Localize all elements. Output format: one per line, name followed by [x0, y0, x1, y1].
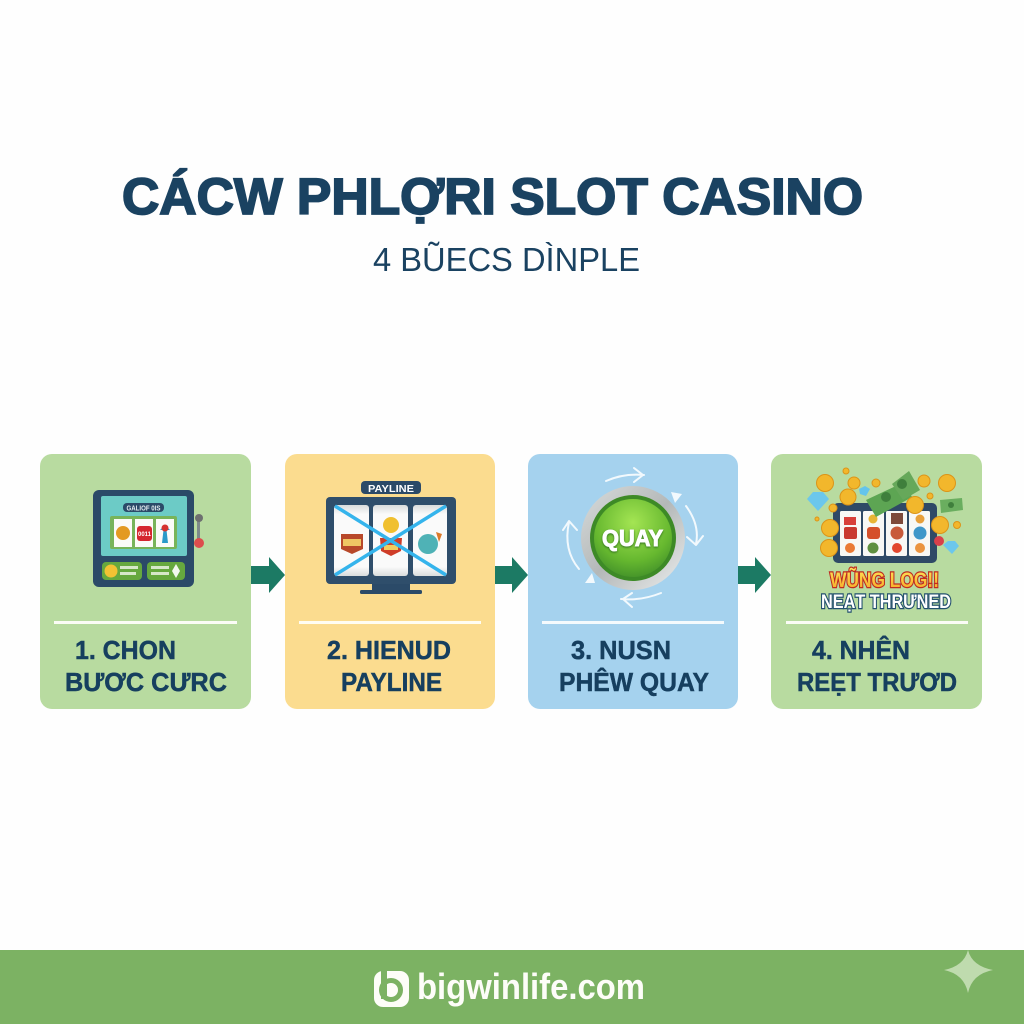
- panel: step 2 payline: [285, 454, 495, 709]
- step 2 card background: [285, 454, 495, 709]
- icon: spin button: QUAY: [602, 525, 663, 551]
- icon: payline monitor: [326, 481, 456, 594]
- step 4 card background: [771, 454, 982, 709]
- badge text: sub banner: NEẠT THRƯNED: [821, 592, 951, 613]
- footer band: [0, 950, 1024, 1024]
- step 2 label: [327, 635, 451, 697]
- step 4 label: [797, 635, 957, 697]
- icon: slot machine: GALIOF 0IS: [126, 506, 161, 512]
- step 1 divider: [54, 621, 237, 624]
- step 4 divider: [786, 621, 968, 624]
- title: CÁCW PHLỢRI SLOT CASINO: [122, 168, 863, 225]
- icon: sparkle: [944, 950, 993, 993]
- step 2 divider: [299, 621, 481, 624]
- step 1 label: BƯƠC CƯRC: [65, 667, 227, 697]
- badge text: win banner: WŨNG LOG!!: [830, 568, 939, 592]
- step 2 label: 2. HIENUD: [327, 635, 451, 665]
- step 3 label: 3. NUSN: [571, 635, 671, 665]
- arrow: step 2 to 3: [495, 557, 528, 593]
- panel: step 4 receive reward: [771, 454, 982, 709]
- step 3 label: PHÊW QUAY: [559, 667, 709, 697]
- panel: step 1 choose bet: [40, 454, 251, 709]
- arrow: step 1 to 2: [251, 557, 285, 593]
- icon: slot machine: [93, 490, 204, 587]
- arrow: step 3 to 4: [738, 557, 771, 593]
- step 3 card background: [528, 454, 738, 709]
- step 3 label: [559, 635, 709, 697]
- step 3 divider: [542, 621, 724, 624]
- step 4 label: 4. NHÊN: [812, 635, 910, 665]
- icon: slot machine: 0011: [138, 532, 152, 538]
- subtitle: 4 BŨECS DÌNPLE: [373, 241, 640, 278]
- icon: brand logo: [374, 971, 409, 1007]
- icon: payline monitor: PAYLINE: [368, 483, 414, 495]
- panel: step 3 spin: [528, 454, 738, 709]
- step 1 label: 1. CHON: [75, 635, 176, 665]
- step 2 label: PAYLINE: [341, 667, 442, 697]
- step 1 label: [65, 635, 227, 697]
- brand name: bigwinlife.com: [417, 966, 645, 1007]
- icon: spin button: [563, 468, 703, 607]
- step 1 card background: [40, 454, 251, 709]
- icon: jackpot slot with coins and cash: [807, 468, 963, 613]
- step 4 label: REẸT TRƯƠD: [797, 667, 957, 697]
